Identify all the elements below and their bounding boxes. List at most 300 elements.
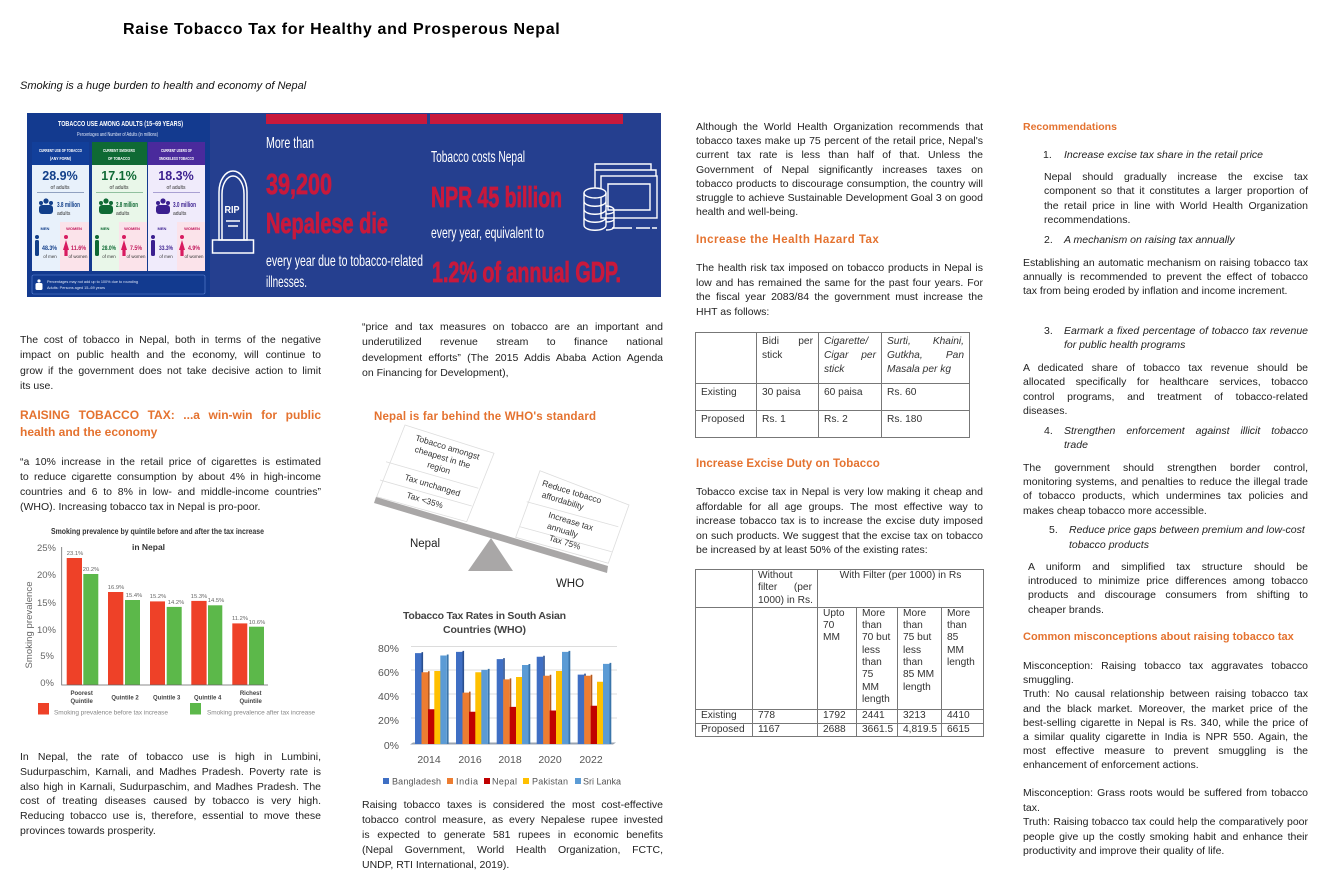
recommendation 5 title: 5.: [1049, 524, 1058, 536]
text: health risk tax: the fiscal year 2083/84 the government must increase the: [696, 291, 983, 303]
chart: smoking prevalence by quintile: Quintile 3: [153, 696, 181, 702]
card: any form: 48.3%: [42, 245, 57, 252]
text: 10 percent increase: (WHO). Increasing tobacco tax in Nepal is pro-poor.: [20, 501, 260, 513]
table: health hazard tax: stick: [762, 350, 782, 361]
card: smokers: of men: [102, 254, 116, 259]
recommendation 3 title: Earmark a fixed percentage of tobacco tax revenue: [1064, 325, 1308, 337]
text: Addis Ababa quote: [362, 321, 663, 379]
heading: WHO standard: Nepal is far behind the WHO's standard: [374, 411, 596, 423]
table: excise duty: 1000) in Rs.: [758, 595, 813, 606]
table: excise duty: MM: [823, 632, 840, 643]
misconception 1: Misconception: Raising tobacco tax aggravates tobacco: [1023, 660, 1308, 672]
recommendation 3 title: 3.: [1044, 325, 1053, 337]
table: excise duty: filter (per: [758, 582, 812, 593]
chart: smoking prevalence by quintile: 20%: [37, 570, 57, 581]
table: excise duty: 4,819.5: [903, 724, 937, 735]
text: WHO recommendation: [696, 121, 983, 218]
card: smokeless: MEN: [158, 226, 167, 231]
stat: deaths: illnesses.: [266, 274, 307, 291]
chart: smoking prevalence by quintile: Quintile: [240, 699, 263, 705]
table: excise duty: than: [862, 657, 882, 668]
chart: smoking prevalence by quintile: Smoking prevalence after tax increase: [207, 710, 315, 716]
weight labels: [404, 433, 603, 552]
chart: smoking prevalence by quintile: 14.2%: [168, 600, 184, 606]
text: WHO recommendation: Although the World Health Organization recommends that: [696, 121, 983, 133]
beam: [374, 497, 608, 573]
table: excise duty: than: [903, 657, 923, 668]
card: smokers: OF TOBACCO: [108, 156, 130, 161]
text: excise tax: on such products. We suggest that the excise tax on tobacco: [696, 530, 983, 542]
legend: Pakistan: [532, 776, 568, 786]
text: health risk tax: HHT as follows:: [696, 306, 769, 318]
chart: smoking prevalence by quintile: 5%: [40, 651, 55, 662]
text: tobacco use in provinces: [20, 751, 321, 837]
stat: cost: Tobacco costs Nepal: [431, 149, 525, 166]
chart: smoking prevalence by quintile: 10.6%: [249, 620, 265, 626]
table: excise duty: 75: [862, 669, 873, 680]
table: excise duty: 2688: [823, 724, 846, 735]
table: excise duty: less: [903, 645, 921, 656]
text: excise tax: Tobacco excise tax in Nepal is very low making it cheap and: [696, 486, 983, 498]
chart: smoking prevalence by quintile: 10%: [37, 625, 57, 636]
series: Nepal: [428, 705, 599, 744]
table: health hazard tax: Rs. 2: [824, 414, 848, 425]
chart: tobacco tax rates: 0%: [384, 740, 399, 752]
misconception 1: best-selling cigarette in Nepal is Rs. 340, while the price of: [1023, 717, 1308, 729]
table: excise duty: than: [903, 620, 923, 631]
chart: smoking prevalence by quintile: Smoking prevalence: [24, 582, 35, 668]
misconception 1: and the black market. Moreover, the market price of the: [1023, 703, 1308, 715]
recommendation 1 text: component so that it constitutes a larger proportion of: [1044, 185, 1308, 197]
table: excise duty: than: [862, 620, 882, 631]
text: health risk tax: [696, 262, 983, 318]
table: excise duty: 75 but: [903, 632, 931, 643]
recommendation 3 text: A dedicated share of tobacco tax revenue should be: [1023, 362, 1308, 374]
table: excise duty: 1167: [758, 724, 780, 735]
card: any form: 11.6%: [71, 245, 86, 252]
table: health hazard tax: Rs. 1: [762, 414, 786, 425]
chart: smoking prevalence by quintile: Richest: [240, 691, 262, 697]
text: cost-effective measure: UNDP, RTI International, 2019).: [362, 859, 509, 871]
recommendation 5 text: products and discourage consumers from shifting to: [1028, 589, 1308, 601]
recommendation 2 text: annually is recommended to prevent the effect of tobacco: [1023, 271, 1308, 283]
text: tobacco use in provinces: provinces towards prosperity.: [20, 825, 156, 837]
text: 10 percent increase: “a 10% increase in the retail price of cigarettes is estimated: [20, 456, 321, 468]
recommendation 3 text: [1023, 362, 1308, 417]
text: tobacco use in provinces: Reducing tobacco use is, therefore, essential to move these: [20, 810, 321, 822]
chart: tobacco tax rates: 2016: [458, 754, 482, 766]
text: tobacco use in provinces: cost of treating diseases caused by tobacco is very high.: [20, 795, 321, 807]
table: health hazard tax: Cigar per: [824, 350, 876, 361]
chart: tobacco tax rates: 2022: [579, 754, 603, 766]
weight labels: annually: [546, 521, 580, 540]
chart: smoking prevalence by quintile: Quintile 4: [194, 696, 222, 702]
recommendation 2 text: tax from being eroded by inflation and income increment.: [1023, 285, 1287, 297]
chart: smoking prevalence by quintile: Smoking prevalence before tax increase: [54, 710, 168, 716]
text: cost of tobacco: [20, 334, 321, 392]
legend: Bangladesh: [392, 776, 441, 786]
recommendation 4 title: 4.: [1044, 425, 1053, 437]
table: health hazard tax: Gutkha, Pan: [887, 350, 964, 361]
stat: cost: NPR 45 billion: [431, 182, 562, 214]
chart: smoking prevalence by quintile: in Nepal: [132, 542, 165, 552]
text: cost of tobacco: its use.: [20, 380, 53, 392]
chart: smoking prevalence by quintile: Poorest: [71, 691, 93, 697]
recommendation 3 text: diseases.: [1023, 405, 1067, 417]
stat: deaths: [266, 135, 423, 291]
chart: smoking prevalence by quintile: Smoking prevalence by quintile before and after the tax increase: [51, 526, 264, 536]
card: smokers: 28.0%: [102, 245, 116, 252]
right weights: [516, 471, 629, 563]
recommendation 4 text: [1023, 462, 1308, 517]
table: health hazard tax: Surti, Khaini,: [887, 336, 964, 347]
stat: cost: 1.2% of annual GDP.: [432, 257, 621, 289]
stat: deaths: Nepalese die: [266, 208, 388, 240]
icon label: RIP: RIP: [224, 205, 240, 216]
card: smokeless: of men: [159, 254, 173, 259]
table: excise duty: More: [903, 608, 926, 619]
table: excise duty: Without: [758, 570, 793, 581]
text: Addis Ababa quote: development efforts” (The 2015 Addis Ababa Action Agenda: [362, 352, 663, 364]
card: smokeless: 18.3%: [158, 169, 194, 183]
text: cost of tobacco: impact on public health and the economy, will continue to: [20, 349, 321, 361]
table: excise duty: 70 but: [862, 632, 890, 643]
recommendation 3 text: allocated specifically for healthcare services, tobacco: [1023, 376, 1308, 388]
table: excise duty: With Filter (per 1000) in Rs: [840, 570, 961, 581]
recommendation 3 text: control programs, and treatment of tobacco-related: [1023, 391, 1308, 403]
recommendation 1 title: 1.: [1043, 149, 1052, 161]
recommendation 5 text: A uniform and simplified tax structure should be: [1028, 561, 1308, 573]
recommendation 5 title: [1049, 524, 1306, 550]
recommendation 3 title: [1044, 325, 1308, 351]
table: health hazard tax: stick: [824, 364, 844, 375]
table: excise duty: [695, 569, 984, 737]
card: smokers: of adults: [110, 185, 129, 191]
table: excise duty: Upto: [823, 608, 845, 619]
recommendation 4 title: [1044, 425, 1308, 451]
text: cost-effective measure: Raising tobacco taxes is considered the most cost-effective: [362, 799, 663, 811]
table: health hazard tax: Masala per kg: [887, 364, 951, 375]
heading: excise duty: Increase Excise Duty on Tobacco: [696, 458, 880, 470]
card: any form: of adults: [51, 185, 70, 191]
card: smokers: 7.5%: [130, 245, 142, 252]
text: cost-effective measure: [362, 799, 663, 871]
card: smokers: 17.1%: [101, 169, 137, 183]
icon: tombstone: [212, 171, 254, 253]
series: Sri Lanka: [440, 651, 611, 744]
recommendation 2 text: [1023, 257, 1308, 297]
recommendation 3 title: for public health programs: [1064, 339, 1185, 351]
heading: misconceptions: Common misconceptions about raising tobacco tax: [1023, 631, 1294, 643]
recommendation 1 title: Increase excise tax share in the retail price: [1064, 149, 1263, 161]
card: smokeless: CURRENT USERS OF: [161, 148, 192, 153]
text: WHO recommendation: struggle to achieve Sustainable Development Goal 3 on good: [696, 192, 983, 204]
card: any form: of women: [68, 254, 88, 259]
card: smokeless: 33.3%: [159, 245, 173, 252]
card: smokers: MEN: [101, 226, 110, 231]
heading: raising tobacco tax: [20, 408, 321, 439]
recommendation 1 text: recommendations.: [1044, 214, 1130, 226]
chart: tobacco tax rates: 2020: [538, 754, 562, 766]
text: excise tax: [696, 486, 983, 556]
card: any form: 3.8 million: [57, 202, 80, 209]
text: excise tax: increase tobacco tax is to increase the excise duty imposed: [696, 515, 983, 527]
subtitle: Smoking is a huge burden to health and economy of Nepal: [20, 80, 306, 92]
text: tobacco use in provinces: In Nepal, the rate of tobacco use is high in Lumbini,: [20, 751, 321, 763]
chart: smoking prevalence by quintile: [24, 526, 315, 716]
recommendation 4 text: of tobacco products, which undermines tax policies and: [1023, 490, 1308, 502]
text: Addis Ababa quote: “price and tax measures on tobacco are an important and: [362, 321, 663, 333]
recommendation 5 text: introduced to minimize price differences among tobacco: [1028, 575, 1308, 587]
table: excise duty: 2441: [862, 710, 885, 721]
chart: smoking prevalence by quintile: Quintile: [71, 699, 94, 705]
table: excise duty: 70: [823, 620, 834, 631]
heading: raising tobacco tax: health and the economy: [20, 425, 157, 439]
table: excise duty: More: [862, 608, 885, 619]
chart: tobacco tax rates: 20%: [378, 715, 399, 727]
card: smokeless: 3.0 million: [173, 202, 196, 209]
weight labels: Tax unchanged: [404, 472, 462, 498]
card: any form: (ANY FORM): [50, 156, 71, 161]
misconception 2: Truth: Raising tobacco tax could help the comparatively poor: [1023, 816, 1308, 828]
table: health hazard tax: Cigarette/: [824, 336, 868, 347]
recommendation 5 title: tobacco products: [1069, 538, 1149, 550]
card: smokers: CURRENT SMOKERS: [103, 148, 135, 153]
table: excise duty: 85: [947, 632, 958, 643]
card: any form: 28.9%: [42, 169, 78, 183]
table: excise duty: MM: [862, 682, 879, 693]
chart: smoking prevalence by quintile: 23.1%: [67, 551, 83, 557]
misconception 2: [1023, 787, 1308, 857]
text: WHO recommendation: Government of Nepal significantly increases taxes on: [696, 164, 983, 176]
panel: tobacco use among adults: TOBACCO USE AMONG ADULTS (15–69 YEARS): [58, 119, 183, 128]
table: excise duty: length: [947, 657, 975, 668]
chart: tobacco tax rates: Tobacco Tax Rates in South Asian: [403, 610, 566, 622]
heading: recommendations: Recommendations: [1023, 121, 1117, 133]
weight labels: region: [426, 459, 452, 476]
recommendation 1 text: Nepal should gradually increase the excise tax: [1044, 171, 1308, 183]
text: WHO recommendation: tobacco products to discourage consumption, the country will: [696, 178, 983, 190]
card: smokeless: [148, 142, 205, 271]
text: 10 percent increase: countries and 6 to 8% in low- and middle-income countries”: [20, 486, 321, 498]
text: excise tax: be increased by at least 50% of the existing rates:: [696, 544, 928, 556]
weight labels: Tax <35%: [405, 490, 445, 511]
recommendation 2 text: Establishing an automatic mechanism on raising tobacco tax: [1023, 257, 1308, 269]
legend: Nepal: [492, 776, 517, 786]
text: cost-effective measure: (Nepal Government, World Health Organization, FCTC,: [362, 844, 663, 856]
text: Addis Ababa quote: underutilized revenue stream to finance national: [362, 336, 663, 348]
heading: raising tobacco tax: RAISING TOBACCO TAX: ...a win-win for public: [20, 408, 321, 422]
misconception 2: Misconception: Grass roots would be suffered from tobacco: [1023, 787, 1308, 799]
table: excise duty: 3213: [903, 710, 926, 721]
text: health risk tax: The health risk tax imposed on tobacco products in Nepal is: [696, 262, 983, 274]
chart: tobacco tax rates: 40%: [378, 691, 399, 703]
table: excise duty: 4410: [947, 710, 970, 721]
chart: smoking prevalence by quintile: 15.4%: [126, 593, 142, 599]
text: 10 percent increase: to reduce cigarette consumption by about 4% in high-income: [20, 471, 321, 483]
table: excise duty: MM: [947, 645, 964, 656]
card: smokeless: 4.9%: [188, 245, 200, 252]
weight labels: Increase tax: [547, 510, 595, 533]
misconception 1: smuggling.: [1023, 674, 1074, 686]
chart: tobacco tax rates: 80%: [378, 643, 399, 655]
card: any form: [32, 142, 89, 271]
table: health hazard tax: [695, 332, 970, 438]
weight labels: Tax 75%: [548, 533, 582, 552]
recommendation 5 text: [1028, 561, 1308, 616]
panel: tobacco use among adults: [27, 113, 210, 297]
stat: deaths: 39,200: [266, 169, 332, 201]
stat: cost: [431, 149, 621, 289]
chart: smoking prevalence by quintile: 15.2%: [150, 594, 166, 600]
text: excise tax: affordable for all age groups. The most effective way to: [696, 500, 983, 512]
card: smokers: WOMEN: [124, 226, 140, 231]
table: health hazard tax: Bidi per: [762, 336, 813, 347]
chart: smoking prevalence by quintile: 15%: [37, 598, 57, 609]
recommendation 1 text: [1044, 171, 1308, 226]
icon: money and coins: [584, 164, 657, 230]
title: Raise Tobacco Tax for Healthy and Prosperous Nepal: [123, 21, 560, 38]
recommendation 4 text: The government should strengthen border control,: [1023, 462, 1308, 474]
card: smokeless: WOMEN: [184, 226, 200, 231]
table: health hazard tax: 30 paisa: [762, 387, 801, 398]
chart: smoking prevalence by quintile: 20.2%: [83, 567, 99, 573]
misconception 2: tax.: [1023, 802, 1040, 814]
table: health hazard tax: Existing: [701, 387, 737, 398]
card: smokers: [92, 142, 147, 271]
table: excise duty: less: [862, 645, 880, 656]
table: excise duty: 6615: [947, 724, 970, 735]
chart: smoking prevalence by quintile: Quintile 2: [111, 696, 139, 702]
table: excise duty: Existing: [701, 710, 737, 721]
heading: health hazard tax: Increase the Health Hazard Tax: [696, 234, 879, 246]
card: smokers: 2.8 million: [116, 202, 138, 209]
text: tobacco use in provinces: Sudurpaschim, Karnali, and Madhes Pradesh. Poverty rate is: [20, 766, 321, 778]
series: India: [422, 671, 592, 744]
card: smokers: adults: [116, 211, 130, 217]
text: Addis Ababa quote: on Financing for Development),: [362, 367, 508, 379]
stat: deaths: More than: [266, 135, 314, 152]
misconception 1: Truth: No causal relationship between raising tobacco tax: [1023, 688, 1308, 700]
misconception 2: productivity and improve their quality of life.: [1023, 845, 1224, 857]
misconception 1: most effective measure to prevent smuggling is the: [1023, 745, 1308, 757]
red strips: [266, 114, 427, 124]
table: excise duty: Proposed: [701, 724, 745, 735]
stat: cost: every year, equivalent to: [431, 225, 544, 242]
text: cost of tobacco: The cost of tobacco in Nepal, both in terms of the negative: [20, 334, 321, 346]
balance diagram: WHO: [556, 578, 584, 590]
table: excise duty: 1792: [823, 710, 846, 721]
card: smokers: of women: [126, 254, 146, 259]
footnote box: Percentages may not add up to 100% due to rounding: [47, 280, 138, 284]
table: excise duty: 778: [758, 710, 775, 721]
recommendation 5 text: cheaper brands.: [1028, 604, 1104, 616]
chart: tobacco tax rates: 2014: [417, 754, 441, 766]
card: smokeless: of adults: [167, 185, 186, 191]
misconception 1: a similar quality cigarette in India is NPR 550. Again, the: [1023, 731, 1308, 743]
table: excise duty: 3661.5: [862, 724, 893, 735]
text: WHO recommendation: current tax rate is less than half of that. Unless the: [696, 149, 983, 161]
card: smokeless: of women: [184, 254, 204, 259]
table: excise duty: length: [903, 682, 931, 693]
chart: smoking prevalence by quintile: 25%: [37, 543, 57, 554]
chart: tobacco tax rates: [378, 610, 621, 786]
weight labels: Reduce tobacco: [541, 478, 603, 505]
recommendation 1 text: the retail price in line with World Health Organization: [1044, 200, 1308, 212]
table: excise duty: 85 MM: [903, 669, 934, 680]
misconception 1: [1023, 660, 1308, 771]
chart: smoking prevalence by quintile: 14.5%: [208, 598, 224, 604]
text: cost-effective measure: tobacco control measure, as every Nepalese rupee invested: [362, 814, 663, 826]
card: smokeless: adults: [173, 211, 187, 217]
series: Pakistan: [434, 670, 605, 744]
table: excise duty: length: [862, 694, 890, 705]
text: 10 percent increase: [20, 456, 321, 513]
card: any form: adults: [57, 211, 71, 217]
weight labels: cheapest in the: [414, 444, 472, 470]
recommendation 2 title: A mechanism on raising tax annually: [1064, 234, 1235, 246]
text: cost of tobacco: grow if the government does not take decisive action to limit: [20, 365, 321, 377]
chart: tobacco tax rates: 60%: [378, 667, 399, 679]
recommendation 5 title: Reduce price gaps between premium and low-cost: [1069, 524, 1305, 536]
card: any form: WOMEN: [66, 226, 82, 231]
legend: [383, 776, 621, 786]
chart: smoking prevalence by quintile: 11.2%: [232, 616, 248, 622]
text: WHO recommendation: health and well-being.: [696, 206, 798, 218]
series: Bangladesh: [415, 651, 586, 744]
recommendation 4 text: makes cheap tobacco more accessible.: [1023, 505, 1207, 517]
card: smokeless: SMOKELESS TOBACCO: [159, 156, 194, 161]
panel: tobacco use among adults: Percentages and Number of Adults (in millions): [77, 132, 158, 138]
chart: smoking prevalence by quintile: 16.9%: [108, 585, 124, 591]
chart: smoking prevalence by quintile: 15.3%: [191, 594, 207, 600]
fulcrum: [468, 538, 513, 571]
table: health hazard tax: Rs. 60: [887, 387, 916, 398]
chart: tobacco tax rates: 2018: [498, 754, 522, 766]
text: tobacco use in provinces: also high in Karnali, Sudurpaschim, and Madhes Pradesh. The: [20, 781, 321, 793]
text: health risk tax: low and has remained the same for the past four years. For: [696, 277, 983, 289]
text: WHO recommendation: tobacco taxes make up 75 percent of the retail price, Nepal's: [696, 135, 983, 147]
misconception 2: people give up the costly smoking habit and enhance their: [1023, 830, 1308, 842]
card: any form: CURRENT USE OF TOBACCO: [39, 148, 82, 153]
legend: India: [456, 776, 478, 786]
text: cost-effective measure: is expected to generate 581 rupees in economic benefits: [362, 829, 663, 841]
recommendation 4 title: Strengthen enforcement against illicit tobacco: [1064, 425, 1308, 437]
card: any form: of men: [43, 254, 57, 259]
stat: deaths: every year due to tobacco-related: [266, 253, 423, 270]
footnote box: [32, 275, 205, 294]
left weights: [377, 425, 494, 522]
table: excise duty: More: [947, 608, 970, 619]
table: health hazard tax: Proposed: [701, 414, 745, 425]
footnote box: Adults: Persons aged 15–69 years: [47, 286, 105, 290]
table: health hazard tax: 60 paisa: [824, 387, 863, 398]
balance diagram: Nepal: [410, 538, 440, 550]
table: health hazard tax: Rs. 180: [887, 414, 922, 425]
recommendation 4 title: trade: [1064, 439, 1088, 451]
weight labels: Tobacco amongst: [414, 433, 482, 462]
legend: Sri Lanka: [583, 776, 621, 786]
recommendation 2 title: 2.: [1044, 234, 1053, 246]
weight labels: affordability: [541, 490, 586, 512]
balance diagram: [374, 425, 629, 590]
card: any form: MEN: [41, 226, 50, 231]
misconception 1: enhancement of enforcement actions.: [1023, 759, 1199, 771]
chart: smoking prevalence by quintile: 0%: [40, 678, 55, 689]
chart: tobacco tax rates: Countries (WHO): [443, 624, 526, 636]
table: excise duty: than: [947, 620, 967, 631]
recommendation 4 text: monitoring systems, and penalties to reduce the illegal trade: [1023, 476, 1308, 488]
